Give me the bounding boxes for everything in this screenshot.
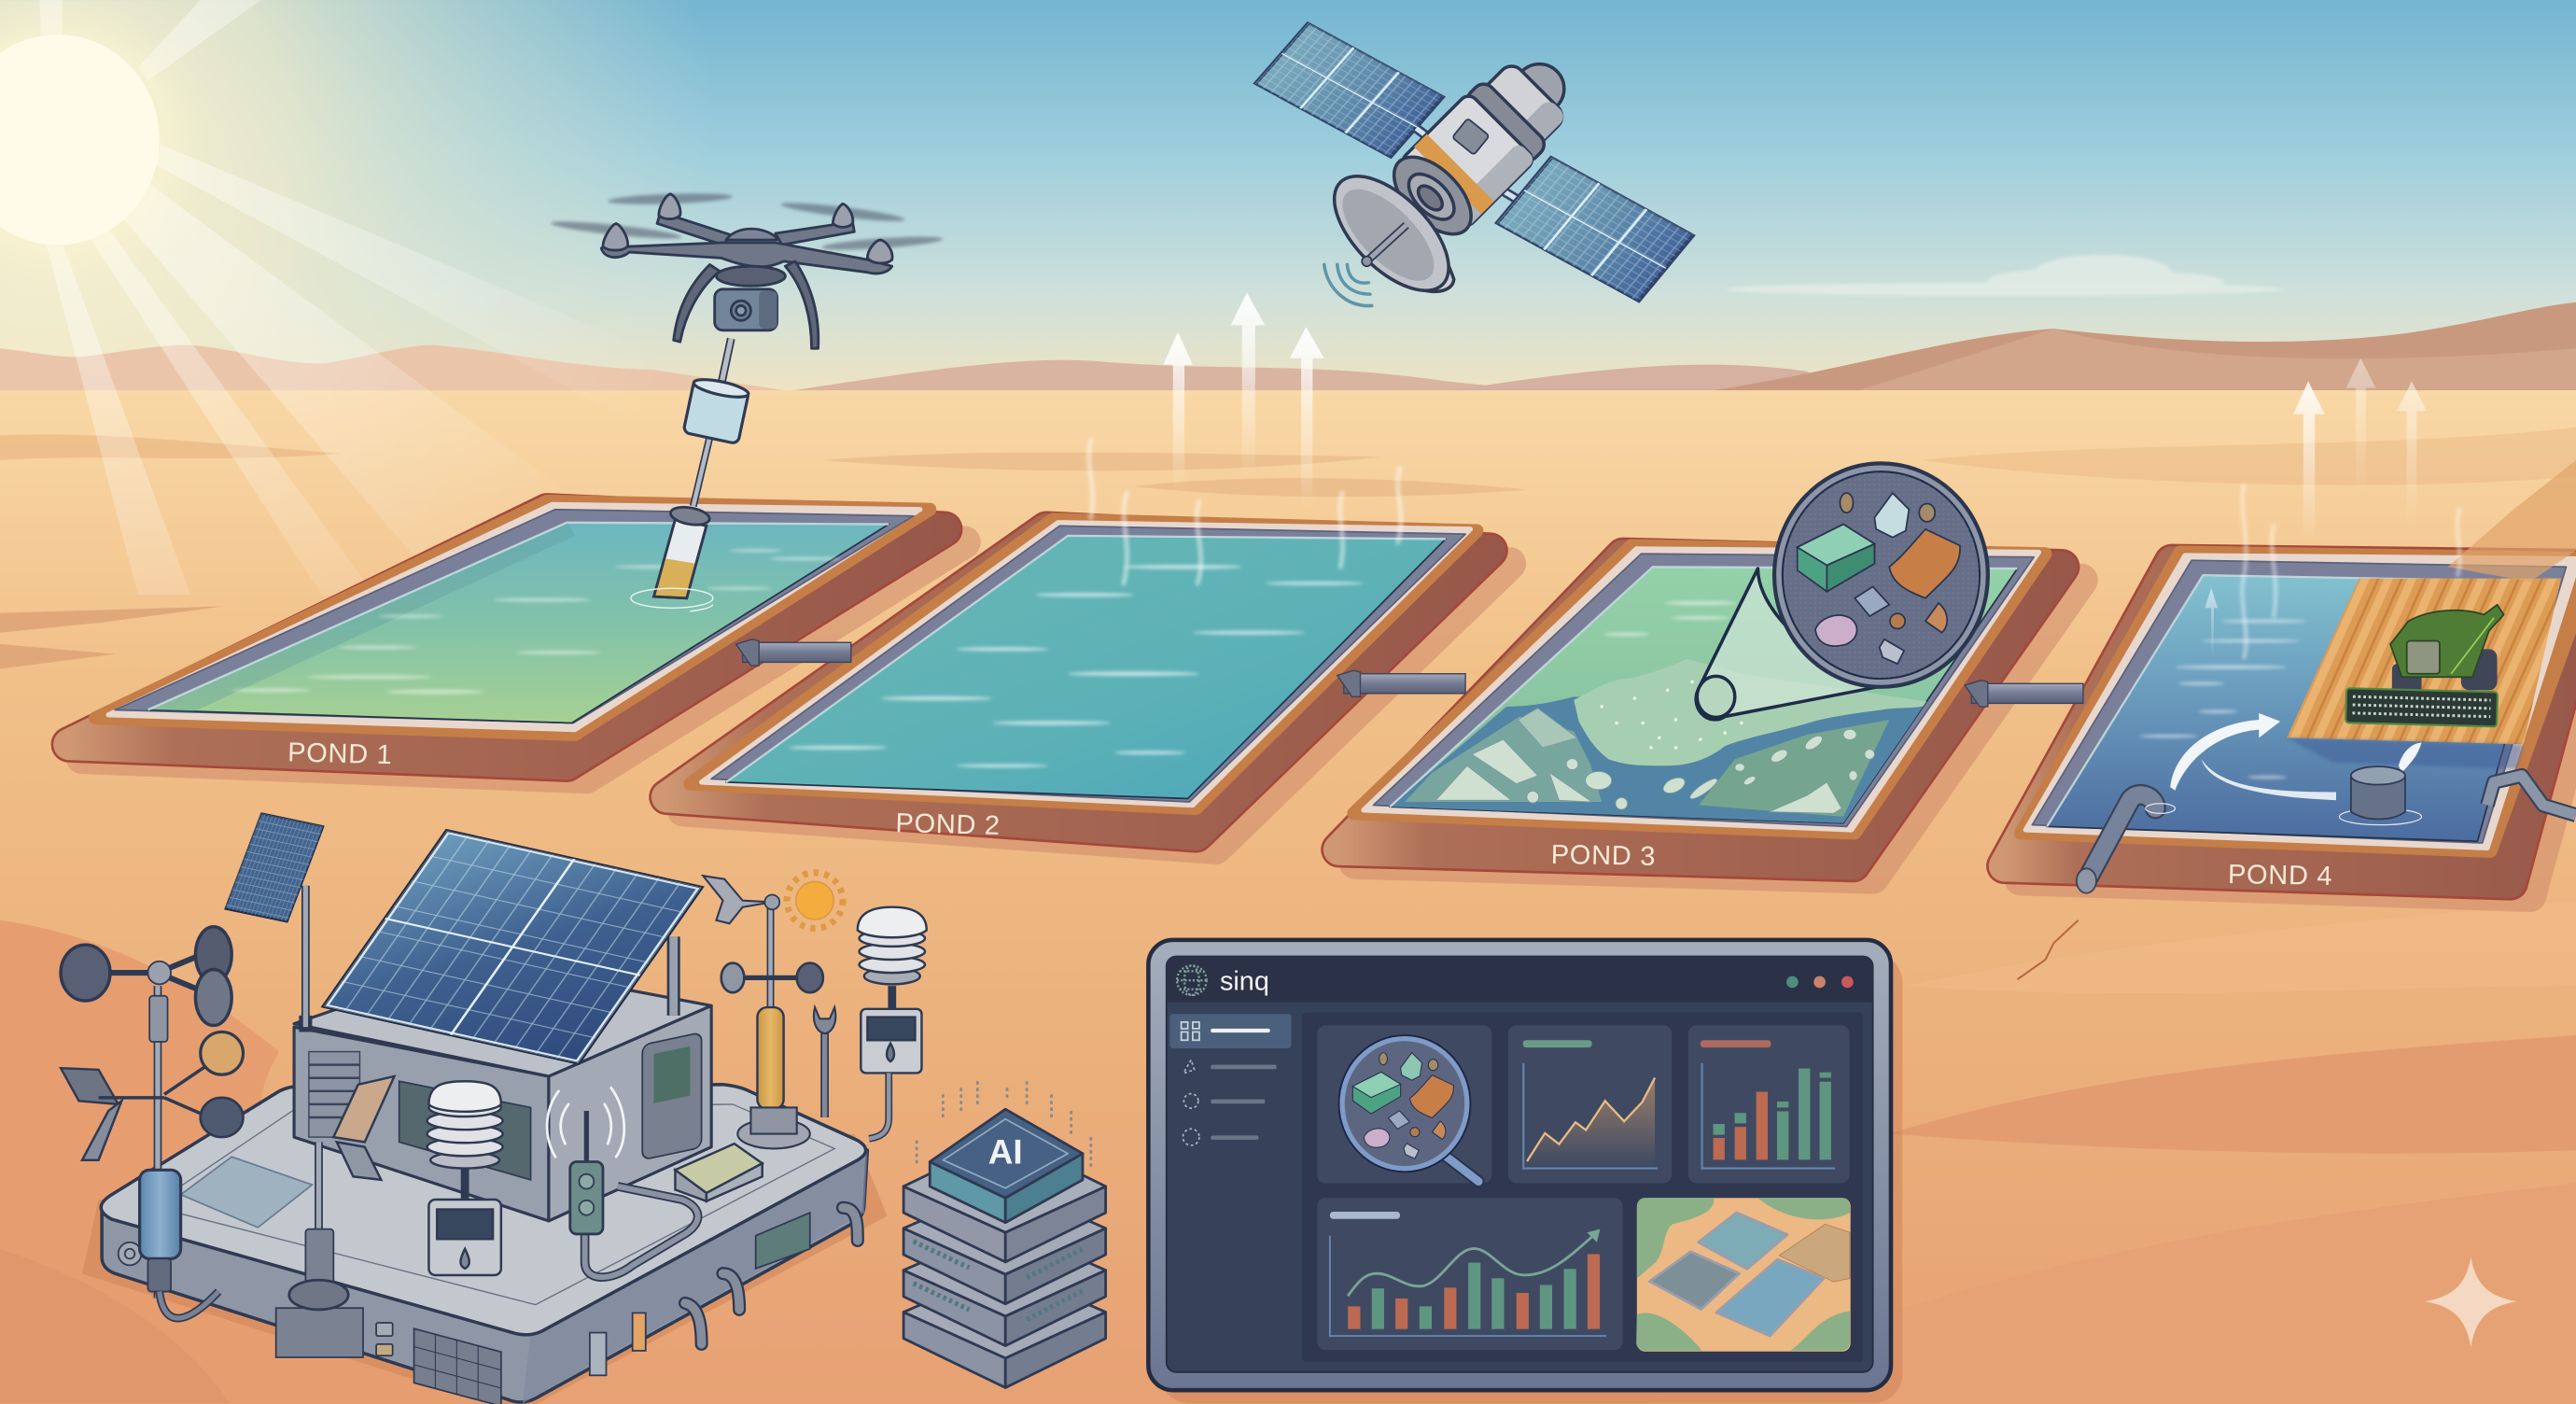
screen (1167, 956, 1873, 1372)
satellite dish (1315, 157, 1468, 310)
ripples (1603, 601, 1737, 636)
louver vent (309, 1052, 359, 1137)
wifi arcs (547, 1088, 624, 1157)
sun rays (39, 0, 722, 595)
magnifier cone (1696, 569, 1878, 720)
right solar panel (1497, 157, 1693, 302)
shadow (2021, 575, 2576, 895)
small pole solar panel (225, 813, 324, 1027)
server layer 4 (903, 1268, 1106, 1388)
data screen (399, 1081, 531, 1180)
label: POND 3 (1551, 840, 1656, 872)
top bar (1167, 956, 1873, 1003)
satellite body (1380, 37, 1590, 248)
main panel (1302, 1012, 1863, 1362)
shadow (82, 525, 964, 778)
logo (1177, 965, 1207, 995)
sun (0, 21, 175, 258)
solar arm right (1491, 184, 1524, 204)
server layer 1 (903, 1137, 1106, 1262)
salt crust (1390, 659, 1939, 823)
salt flat field (2287, 579, 2561, 744)
pipe 3 to 4 (1965, 681, 2083, 707)
drone with sampling probe (551, 191, 944, 611)
control panel (642, 1032, 702, 1160)
sparkle watermark (2425, 1257, 2517, 1347)
tilted vane pole (289, 1076, 394, 1310)
sky background (0, 0, 2576, 394)
platform side (102, 1150, 867, 1402)
ripples (2139, 620, 2306, 779)
antenna transmitter (570, 1111, 698, 1277)
pipe 2 to 3 (1337, 670, 1465, 696)
data logger (675, 1144, 763, 1201)
drone arms and body (601, 194, 892, 348)
label: POND 2 (895, 808, 1001, 841)
card: stacked bars (1688, 1025, 1849, 1183)
desert ground (0, 390, 2576, 1404)
sensor cylinder (683, 376, 749, 444)
sensor cable (869, 1073, 889, 1139)
magnifier callout: mineral crystals (1696, 463, 1988, 720)
outlet pipe (2487, 776, 2576, 815)
tablet frame (1148, 940, 1891, 1390)
pipe 1 to 2 (736, 639, 851, 666)
water ripple (631, 588, 713, 611)
pond 3 (1339, 545, 2081, 878)
AI label: AI (988, 1132, 1023, 1171)
pond 1 (69, 501, 964, 778)
cloud (1725, 255, 2284, 296)
AI chip (930, 1109, 1083, 1223)
brine drum (2340, 766, 2422, 825)
sample tube (654, 504, 711, 598)
ripples (231, 549, 841, 695)
ripples (789, 565, 1364, 767)
sun glow (0, 0, 854, 394)
sinq dashboard (1148, 940, 1902, 1403)
anemometer mast (61, 927, 244, 1299)
radiation shield and humidity sensor, front (427, 1081, 503, 1275)
hose ports (685, 1208, 858, 1344)
sun icon (787, 873, 843, 929)
shadow (1160, 953, 1902, 1403)
main solar panel (305, 831, 702, 1063)
card: site map (1636, 1198, 1851, 1352)
label: POND 1 (287, 737, 393, 770)
card: line chart (1508, 1025, 1672, 1183)
side panels and ports (119, 1213, 810, 1404)
crystals (1798, 493, 1960, 664)
rotors (551, 191, 944, 252)
small focus circle (1697, 676, 1735, 717)
window dots (1786, 976, 1854, 988)
lens (1774, 463, 1988, 687)
circulation arrows (2170, 713, 2422, 800)
pipes between ponds (736, 639, 2083, 707)
right mast, vane and sun sensor (703, 876, 823, 1148)
server layer 3 (903, 1226, 1106, 1346)
server layer 2 (903, 1184, 1106, 1304)
distant mountains (0, 302, 2576, 391)
evaporation arrows and steam: pond 2 (1089, 292, 1401, 583)
data streams (917, 1081, 1091, 1167)
haul track (2448, 460, 2576, 582)
small flat panel on deck (181, 1157, 312, 1228)
sidebar navigation (1169, 1014, 1292, 1145)
shadow (1355, 569, 2081, 878)
probe rod (721, 339, 731, 385)
field station (61, 813, 927, 1404)
harvester (2345, 605, 2504, 726)
solar arm left (1416, 128, 1442, 147)
pond 4 (2004, 460, 2576, 895)
card: combo trend chart (1317, 1198, 1623, 1350)
sand dune shading (0, 428, 2576, 1403)
AI server stack (903, 1081, 1106, 1388)
ground crack (2018, 920, 2079, 979)
platform top (101, 1085, 866, 1335)
brand name: sinq (1220, 967, 1269, 997)
signal arcs (1324, 264, 1372, 306)
pond 2 (667, 519, 1510, 848)
wrench (814, 1007, 835, 1117)
lower cable (160, 1292, 218, 1318)
inlet pipe (2077, 794, 2176, 893)
left solar panel (1255, 23, 1444, 157)
equipment box (294, 962, 711, 1221)
evaporation arrows and steam: pond 4 (2242, 358, 2460, 657)
right radiation shield sensor (858, 907, 927, 1073)
shadow (683, 542, 1510, 848)
ground shadow (82, 1134, 888, 1404)
label: POND 4 (2228, 860, 2333, 892)
card: crystals magnifier (1317, 1025, 1491, 1183)
satellite (1255, 23, 1693, 310)
upward vapour arrow inside pond (2205, 588, 2218, 657)
